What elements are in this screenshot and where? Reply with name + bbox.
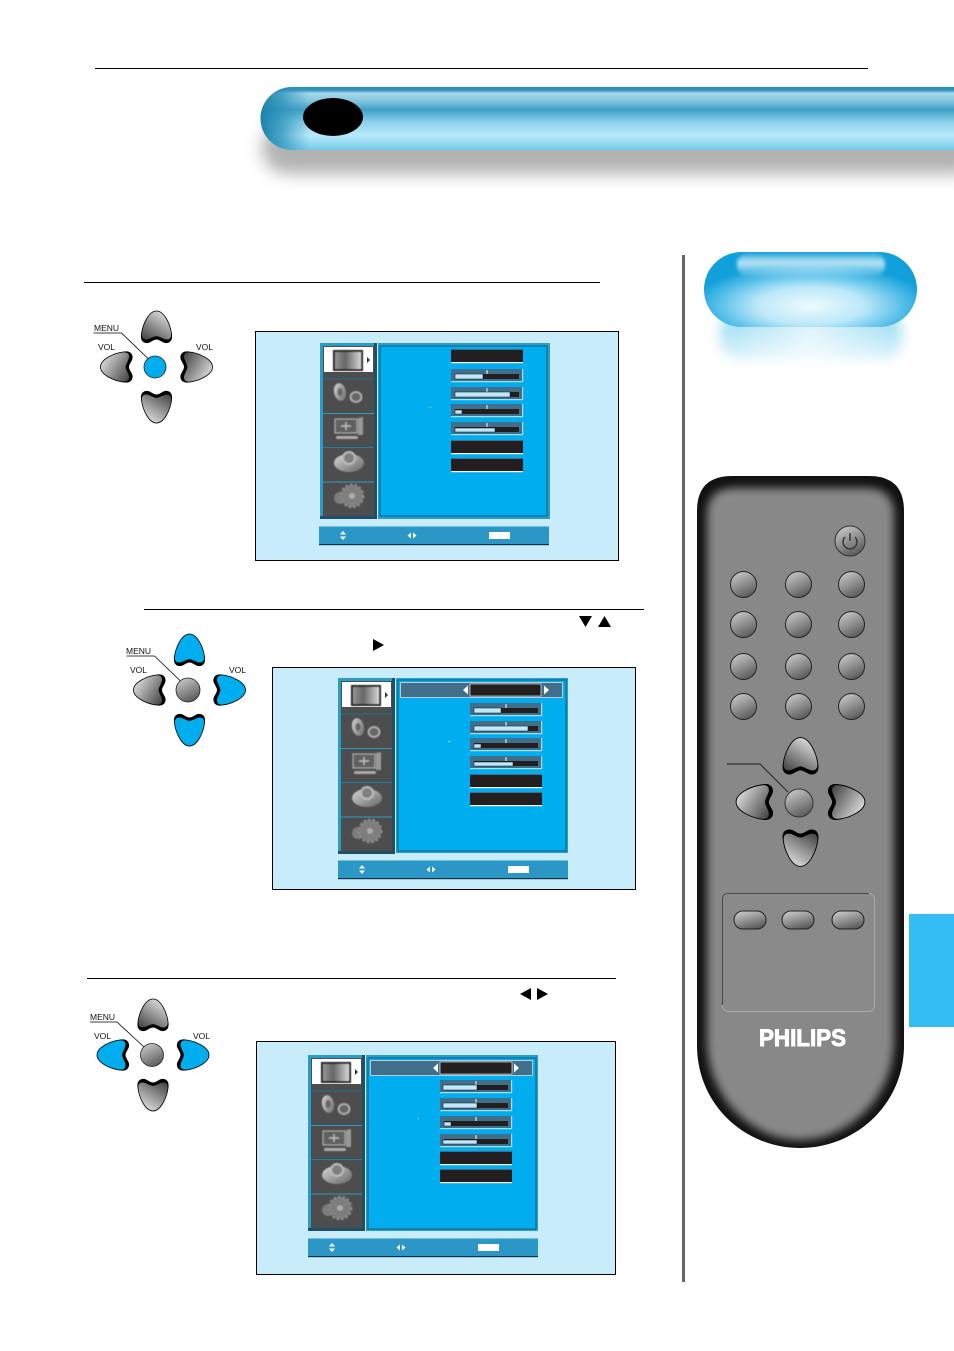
panel: menu screen 2: [272, 668, 636, 890]
remote control: [690, 470, 910, 1160]
number buttons: [730, 572, 864, 720]
panel: menu screen 3: [256, 1042, 616, 1274]
menu icons column: [338, 678, 395, 854]
footer bar: [338, 860, 568, 879]
button pad 2: up, down, right highlighted: MENU: [126, 646, 151, 656]
button pad 1: menu highlighted: MENU: [94, 323, 119, 333]
main menu area: [366, 1055, 538, 1231]
button pad 1: menu highlighted: [94, 311, 213, 423]
panel: menu screen 1: [256, 332, 618, 560]
icon: left and right arrows: [520, 988, 548, 1000]
main menu area: [396, 678, 568, 853]
setting rows: [451, 349, 523, 472]
glossy side pill heading: [700, 252, 922, 376]
button pad 1: menu highlighted: VOL: [98, 342, 115, 352]
footer bar: [308, 1238, 538, 1257]
lower button cover: [722, 894, 874, 1012]
setting rows: [470, 703, 542, 806]
icon: right arrow: [373, 639, 384, 651]
chapter tab: [909, 914, 954, 1027]
setting rows: [440, 1080, 512, 1183]
button pad 3: left and right highlighted: [90, 999, 210, 1111]
title banner: [261, 87, 954, 174]
main menu area: [378, 343, 550, 519]
button pad 3: left and right highlighted: VOL: [193, 1031, 210, 1041]
button pad 2: up, down, right highlighted: VOL: [130, 665, 147, 675]
footer bar: [319, 526, 549, 545]
icon: down and up arrows: [579, 616, 611, 627]
button pad 3: left and right highlighted: MENU: [90, 1012, 115, 1022]
highlighted row: [370, 1060, 532, 1076]
section 1 rule: [84, 282, 600, 283]
title number badge: [303, 98, 363, 136]
button pad 1: menu highlighted: VOL: [196, 342, 213, 352]
power button: [835, 526, 865, 556]
remote navigation pad: [727, 738, 865, 866]
button pad 2: up, down, right highlighted: VOL: [229, 665, 246, 675]
button pad 2: up, down, right highlighted: [126, 634, 246, 746]
brand logo text: PHILIPS: [759, 1025, 846, 1052]
section 3 rule: [87, 978, 616, 979]
highlighted row: [400, 682, 562, 698]
menu icons column: [308, 1055, 365, 1231]
top rule: [95, 68, 868, 69]
menu icons column: [320, 343, 377, 519]
section 2 rule: [144, 609, 644, 610]
sidebar divider: [682, 255, 685, 1282]
button pad 3: left and right highlighted: VOL: [94, 1031, 111, 1041]
